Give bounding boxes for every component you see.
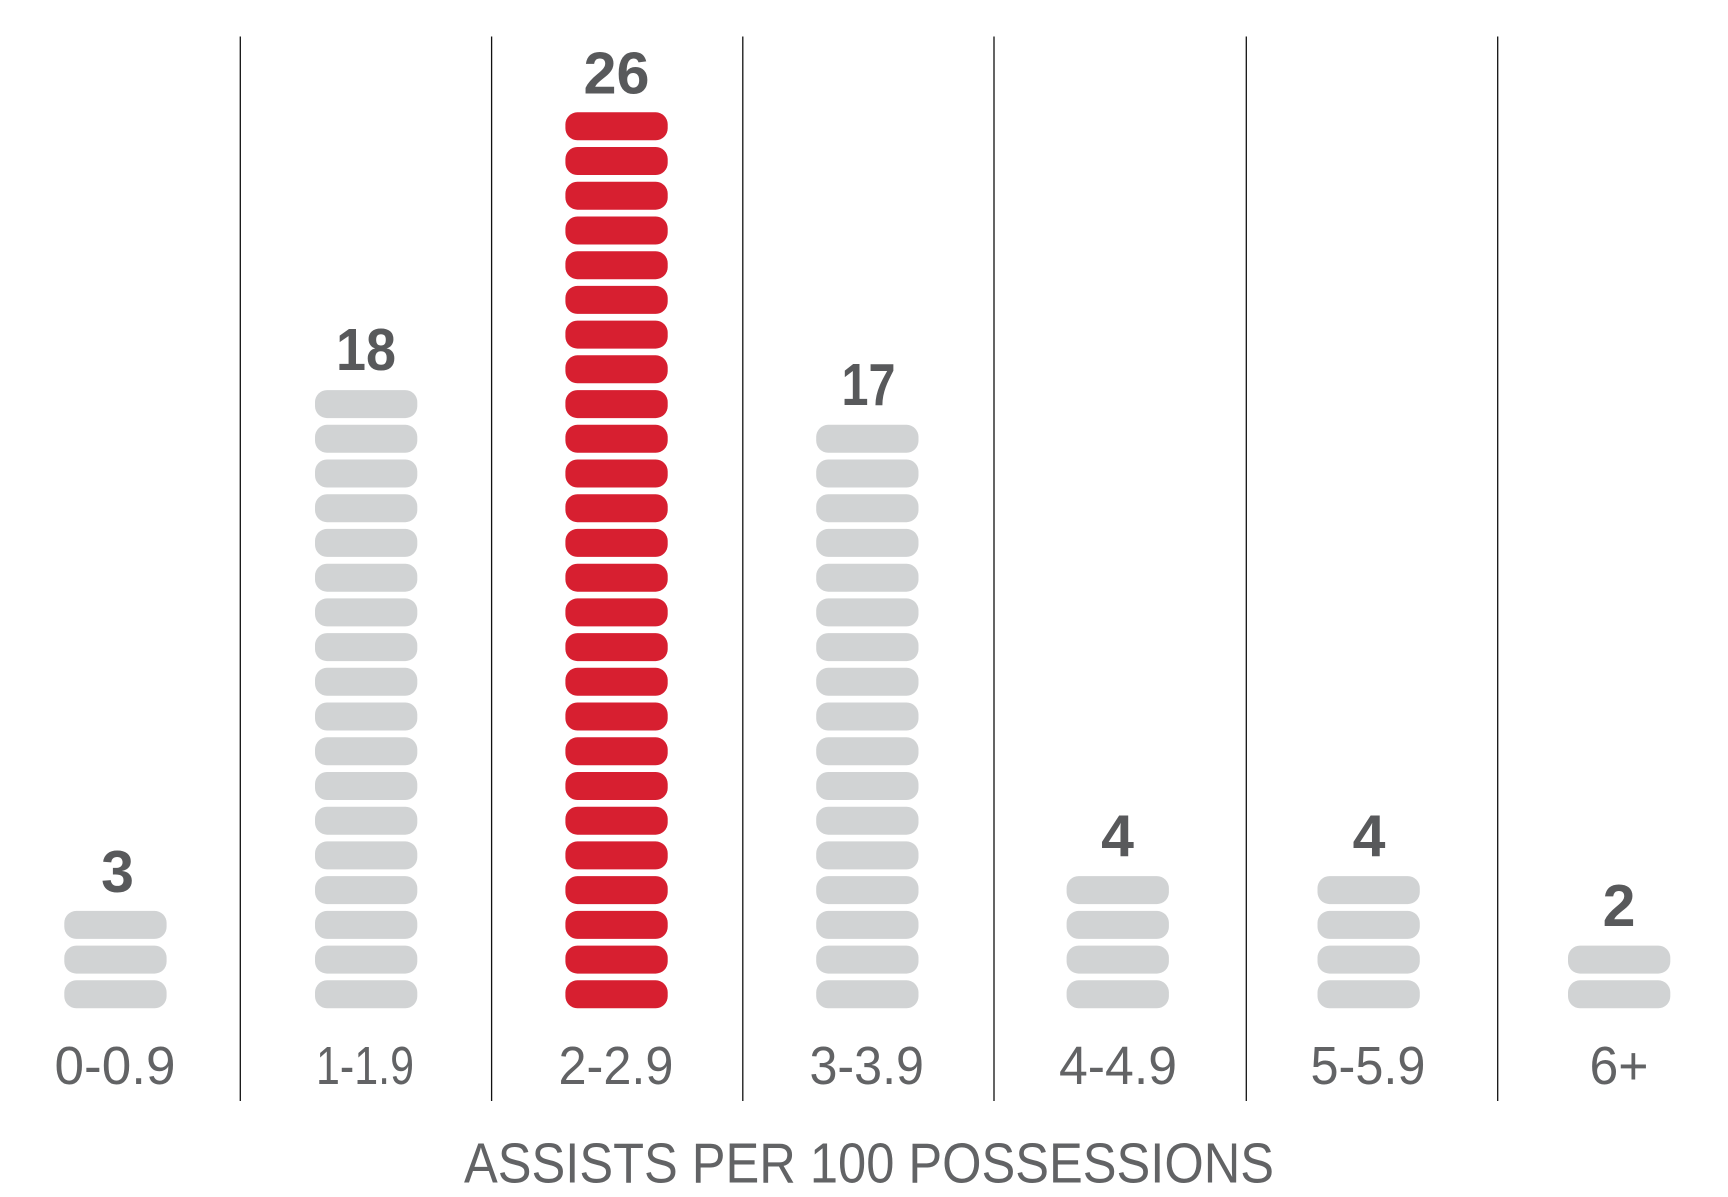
- range label: 4-4.9: 4-4.9: [1059, 1036, 1177, 1096]
- value: 18: 18: [336, 317, 396, 383]
- axis title: ASSISTS PER 100 POSSESSIONS: [464, 1132, 1274, 1196]
- column: 1-1.9: [315, 317, 417, 1096]
- range label: 0-0.9: 0-0.9: [54, 1036, 176, 1096]
- value: 26: 26: [584, 40, 650, 106]
- stacked bar: 2 units: [1568, 946, 1670, 1008]
- stacked bar: 26 units, red: [565, 112, 668, 1008]
- range label: 5-5.9: 5-5.9: [1310, 1036, 1426, 1096]
- value: 3: 3: [101, 839, 134, 905]
- stacked bar: 17 units: [816, 425, 918, 1008]
- stacked bar: 3 units: [64, 911, 167, 1008]
- stacked bar: 4 units: [1318, 876, 1420, 1008]
- column: 2-2.9 (highlighted): [558, 40, 674, 1096]
- value: 4: 4: [1353, 804, 1386, 870]
- value: 2: 2: [1603, 873, 1635, 939]
- column: 5-5.9: [1310, 804, 1426, 1096]
- range label: 3-3.9: 3-3.9: [810, 1036, 924, 1096]
- range label: 2-2.9: 2-2.9: [558, 1036, 674, 1096]
- column: 3-3.9: [810, 352, 924, 1096]
- column: 6+: [1568, 873, 1670, 1096]
- column: 4-4.9: [1059, 804, 1177, 1096]
- value: 4: 4: [1101, 804, 1134, 870]
- stacked bar: 4 units: [1067, 876, 1169, 1008]
- range label: 6+: 6+: [1590, 1036, 1648, 1096]
- value: 17: 17: [842, 352, 896, 418]
- stacked bar: 18 units: [315, 390, 417, 1008]
- range label: 1-1.9: 1-1.9: [316, 1036, 414, 1096]
- column: 0-0.9: [54, 839, 176, 1096]
